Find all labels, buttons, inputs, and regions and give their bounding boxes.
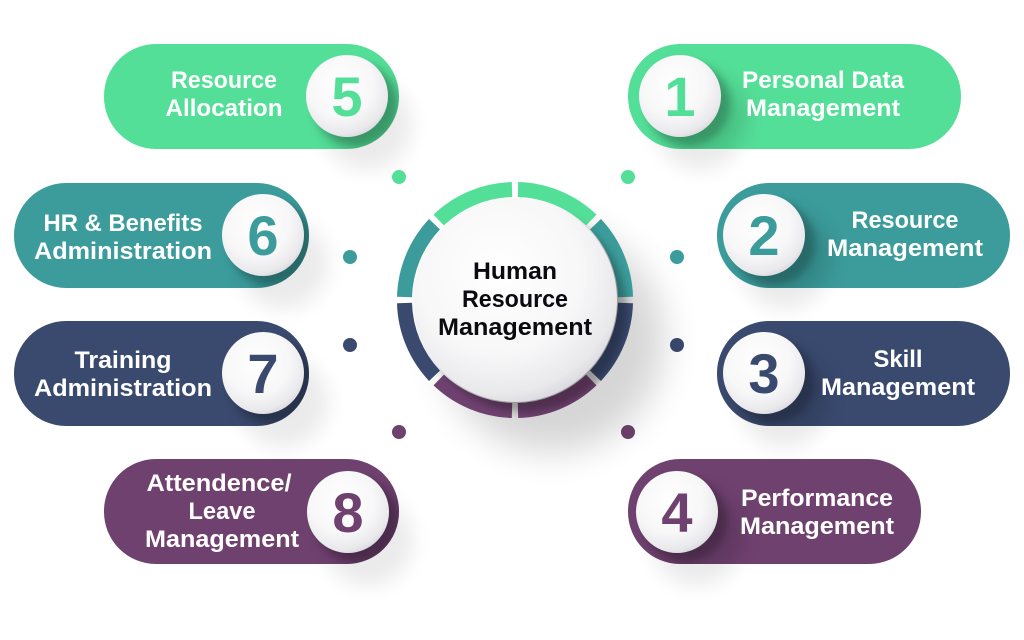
label 7: Administration (34, 375, 212, 402)
label 3: Skill (874, 346, 922, 373)
label 6: HR & Benefits (44, 210, 202, 237)
panel: item 1 Personal Data Management (628, 44, 961, 170)
badge 2 (723, 194, 805, 276)
label 1: Management (746, 95, 900, 122)
pill 5 (104, 44, 399, 149)
badge 5 (306, 55, 388, 137)
label 4: Management (740, 513, 894, 540)
badge 3 (723, 332, 805, 414)
number 1: 1 (664, 65, 696, 128)
pill 2 (717, 183, 1010, 288)
center title: Human (473, 258, 557, 285)
number 3: 3 (748, 342, 780, 405)
badge 1 (639, 55, 721, 137)
label 4: Performance (741, 485, 893, 512)
pill 1 (628, 44, 961, 149)
panel: item 8 Attendence/Leave Management (104, 459, 414, 586)
badge 6 (222, 194, 304, 276)
badge 4 (636, 471, 718, 553)
center title: Management (438, 314, 592, 341)
label 5: Resource (171, 67, 277, 94)
panel: item 4 Performance Management (628, 459, 921, 586)
panel: item 3 Skill Management (717, 321, 1010, 447)
segmented ring (404, 190, 626, 410)
label 8: Attendence/ (146, 470, 292, 497)
badge 7 (222, 332, 304, 414)
connector dots (343, 170, 684, 439)
number 7: 7 (247, 342, 279, 405)
pill 8 (104, 459, 399, 564)
pill 4 (628, 459, 921, 564)
label 5: Allocation (166, 95, 282, 122)
label 2: Management (827, 235, 983, 262)
label 7: Training (74, 347, 172, 374)
number 5: 5 (331, 65, 363, 128)
panel: item 2 Resource Management (717, 183, 1010, 309)
label 3: Management (821, 374, 975, 401)
number 2: 2 (748, 204, 780, 267)
central hub (404, 190, 664, 452)
label 1: Personal Data (742, 67, 905, 94)
pill 6 (14, 183, 309, 288)
label 2: Resource (852, 207, 958, 234)
badge 8 (307, 471, 389, 553)
center title: Resource (462, 286, 568, 313)
label 8: Leave (188, 498, 256, 525)
number 4: 4 (661, 481, 693, 544)
pill 7 (14, 321, 309, 426)
label 6: Administration (34, 238, 212, 265)
number 6: 6 (247, 204, 279, 267)
number 8: 8 (332, 481, 364, 544)
center ball (413, 198, 617, 402)
pill 3 (717, 321, 1010, 426)
panel: item 5 Resource Allocation (104, 44, 413, 170)
panel: item 7 Training Administration (14, 321, 329, 447)
panel: item 6 HR and Benefits Administration (14, 183, 329, 309)
label 8: Management (145, 526, 299, 553)
